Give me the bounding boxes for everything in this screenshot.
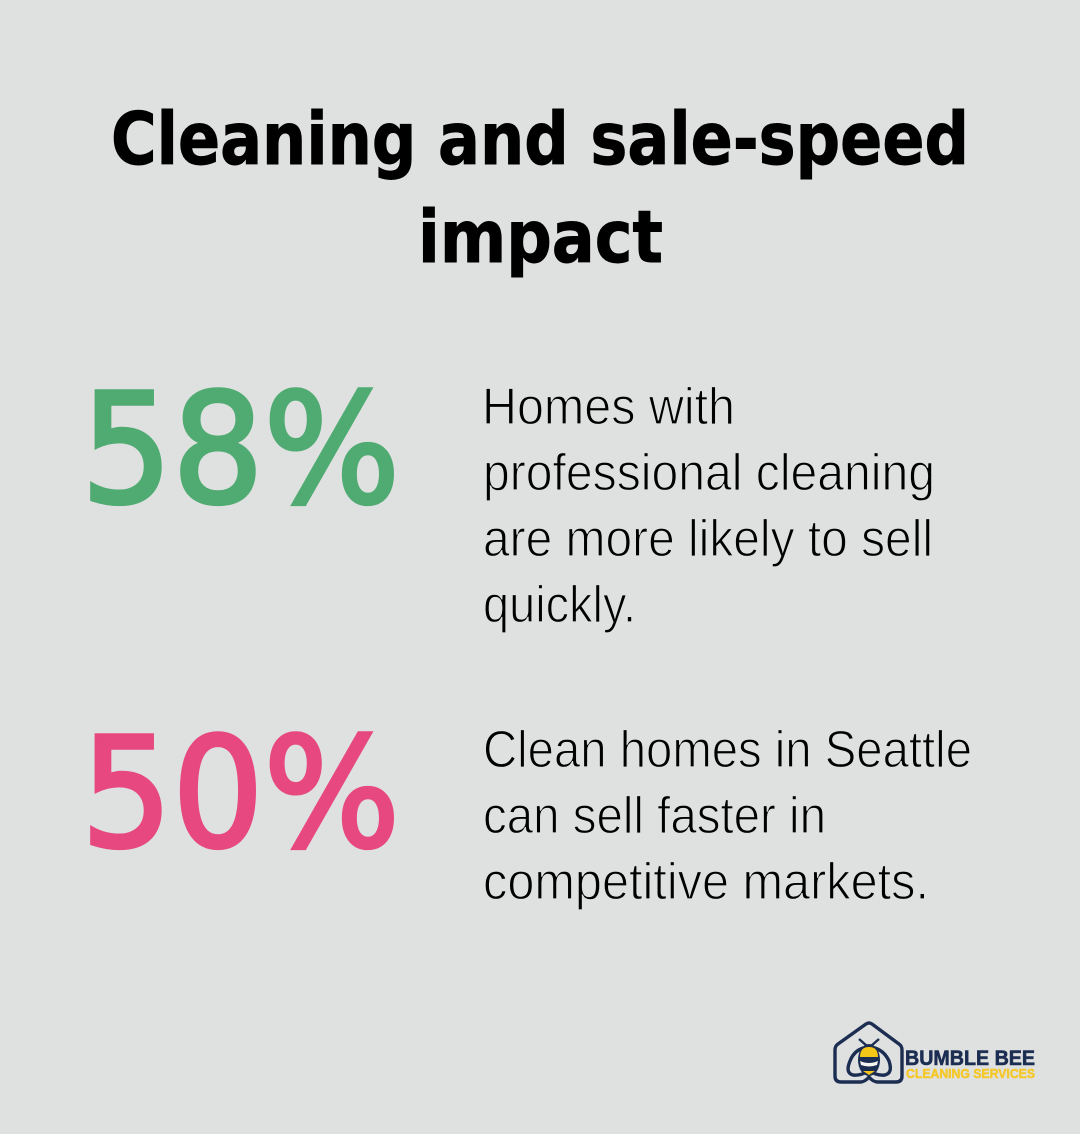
title: impact [418, 195, 663, 279]
text block: 50% description: can sell faster in [483, 786, 826, 844]
logo tagline: CLEANING SERVICES [906, 1067, 1035, 1081]
title: Cleaning and sale-speed [111, 97, 969, 181]
text block: 50% description [483, 720, 972, 910]
logo: Bumble Bee Cleaning Services [835, 1023, 1035, 1082]
stat: 58%: 58% [81, 361, 400, 538]
text block: 50% description: Clean homes in Seattle [483, 720, 972, 778]
icon: house with bee [835, 1023, 902, 1082]
stat: 50%: 50% [81, 705, 400, 882]
text block: 58% description: quickly. [483, 575, 636, 633]
text block: 58% description [482, 377, 935, 633]
text block: 50% description: competitive markets. [483, 852, 929, 910]
text block: 58% description: Homes with [482, 377, 735, 435]
title [111, 97, 969, 279]
text block: 58% description: professional cleaning [483, 443, 935, 501]
logo wordmark: BUMBLE BEE [905, 1047, 1035, 1070]
text block: 58% description: are more likely to sell [483, 509, 933, 567]
